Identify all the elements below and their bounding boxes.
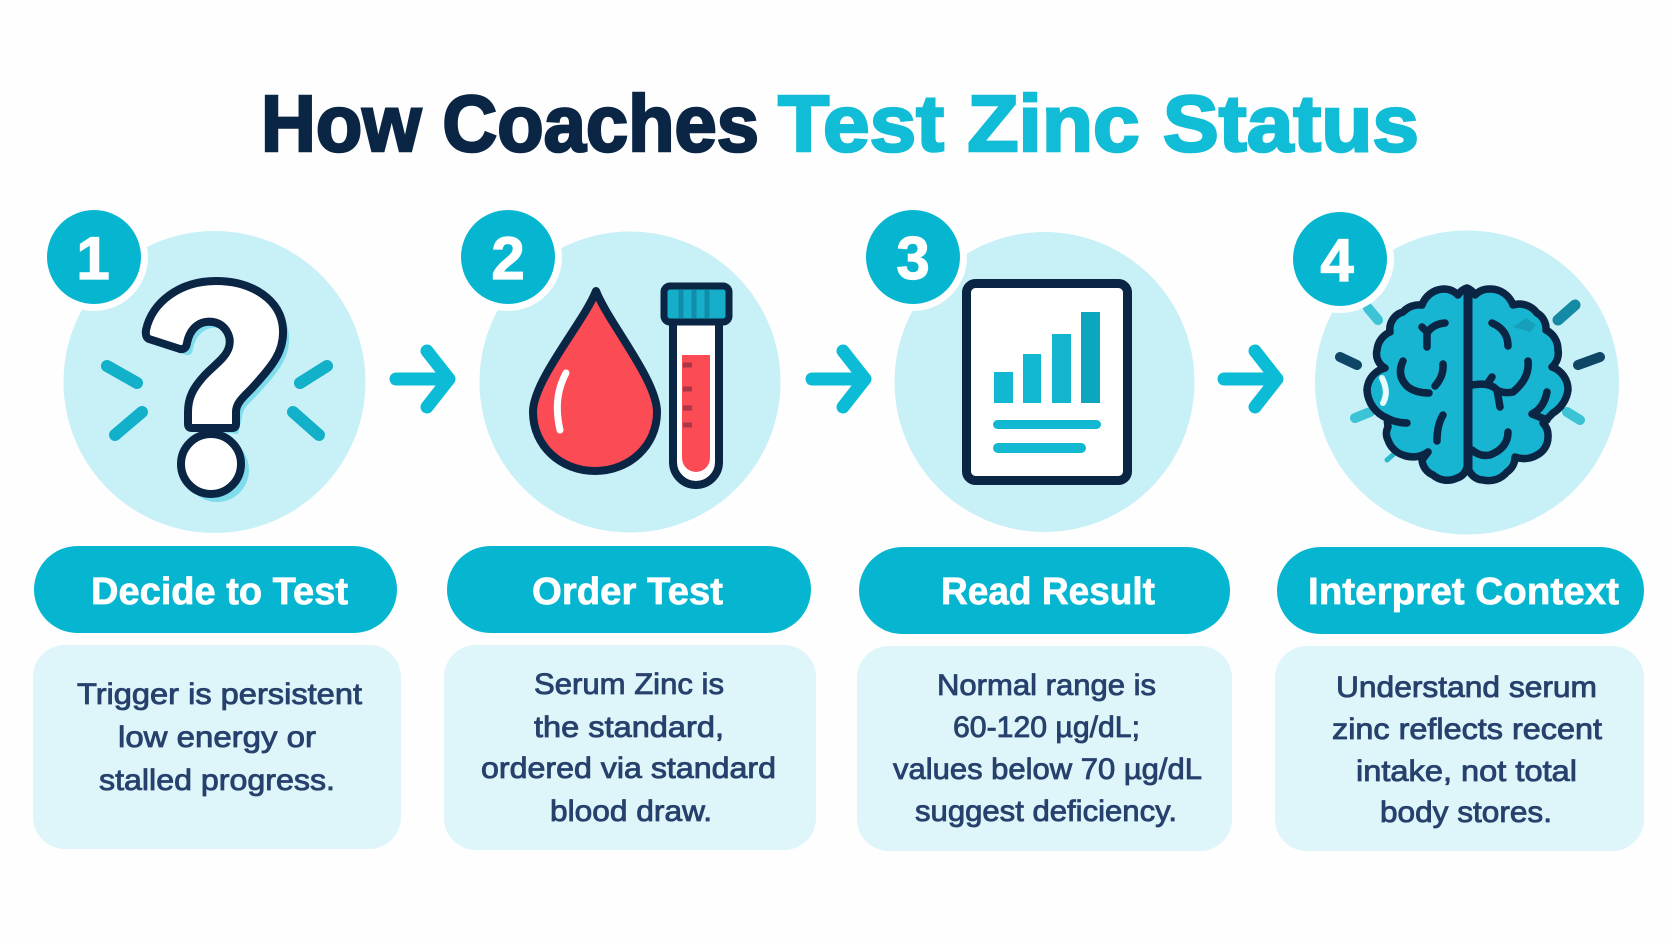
icon: brain <box>1340 288 1600 481</box>
text card: read result <box>857 646 1232 851</box>
icon circle: step 2 <box>480 232 780 532</box>
label pill: decide to test <box>34 546 397 633</box>
text card: order test <box>444 645 816 850</box>
label pill: interpret context <box>1277 547 1644 634</box>
text card: interpret context: Understand serum <box>1336 671 1597 704</box>
step number badge 3 <box>859 203 967 311</box>
text card: order test: ordered via standard <box>481 752 776 785</box>
step number badge 3: 3 <box>896 225 930 292</box>
label pill: order test: Order Test <box>532 571 723 613</box>
text card: interpret context: intake, not total <box>1356 755 1577 788</box>
label pill: order test <box>447 546 811 633</box>
label pill: read result <box>859 547 1230 634</box>
title <box>261 79 1419 168</box>
text card: order test: blood draw. <box>550 795 712 828</box>
arrow: step 1 to 2 <box>396 351 449 407</box>
icon circle: step 3 <box>894 232 1194 532</box>
icon: question mark <box>107 281 327 502</box>
panel: step 1 decide to test <box>33 203 401 849</box>
panel: step 2 order test <box>444 203 816 850</box>
icon circle: step 4 <box>1315 230 1619 534</box>
text card: decide to test <box>33 645 401 849</box>
title: How Coaches <box>261 79 759 168</box>
panel: step 4 interpret context <box>1275 205 1644 851</box>
icon circle: step 1 <box>64 231 366 533</box>
icon: test tube <box>664 286 729 485</box>
text card: decide to test: stalled progress. <box>99 764 335 797</box>
text card: read result: values below 70 µg/dL <box>893 753 1202 786</box>
text card: order test: Serum Zinc is <box>534 668 724 701</box>
icon: blood drop <box>533 291 657 471</box>
icon: report with bar chart <box>966 284 1128 480</box>
panel: step 3 read result <box>857 203 1232 851</box>
step number badge 1 <box>40 203 148 311</box>
text card: read result: 60-120 µg/dL; <box>953 711 1140 744</box>
text card: read result: Normal range is <box>937 669 1156 702</box>
text card: read result: suggest deficiency. <box>915 795 1177 828</box>
label pill: decide to test: Decide to Test <box>91 571 348 613</box>
text card: decide to test: Trigger is persistent <box>77 678 363 711</box>
text card: order test: the standard, <box>534 711 724 744</box>
title: Test Zinc Status <box>778 79 1419 168</box>
label pill: read result: Read Result <box>941 571 1155 613</box>
text card: interpret context: zinc reflects recent <box>1332 713 1603 746</box>
step number badge 4 <box>1286 205 1394 313</box>
text card: interpret context <box>1275 646 1644 851</box>
step number badge 4: 4 <box>1320 227 1354 294</box>
label pill: interpret context: Interpret Context <box>1308 571 1619 613</box>
arrow: step 3 to 4 <box>1224 351 1277 407</box>
step number badge 2 <box>454 203 562 311</box>
step number badge 2: 2 <box>491 225 525 292</box>
arrow: step 2 to 3 <box>812 351 865 407</box>
step number badge 1: 1 <box>76 225 110 292</box>
text card: decide to test: low energy or <box>118 721 316 754</box>
text card: interpret context: body stores. <box>1380 796 1552 829</box>
